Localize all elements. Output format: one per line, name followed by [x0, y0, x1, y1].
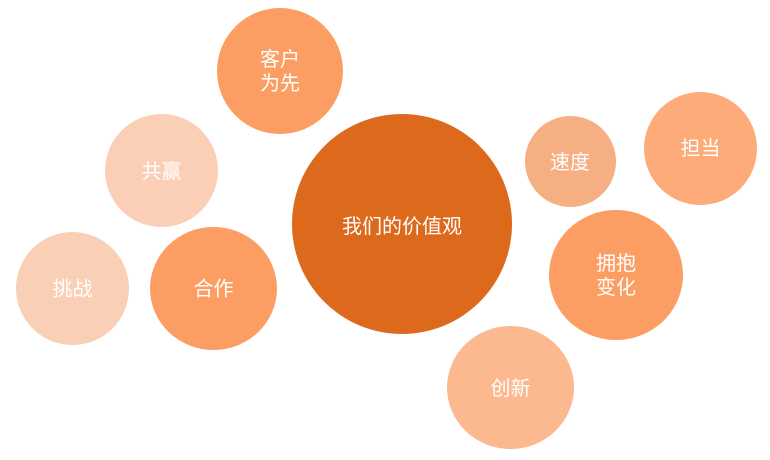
bubble: 担当: 担当: [680, 137, 720, 160]
bubble: 创新: 创新: [490, 377, 530, 400]
bubble: 共赢: [105, 114, 218, 227]
bubble: 创新: [447, 326, 574, 449]
bubble: 拥抱变化: [549, 210, 683, 340]
bubble: 客户为先: 客户: [260, 48, 300, 71]
bubble: 挑战: [16, 232, 129, 345]
central bubble: 我们的价值观: 我们的价值观: [342, 215, 462, 238]
bubble: 共赢: 共赢: [142, 160, 182, 183]
bubble: 拥抱变化: 拥抱: [596, 252, 636, 275]
central bubble: 我们的价值观: [292, 114, 512, 334]
bubble: 速度: 速度: [550, 151, 590, 174]
bubble: 合作: [150, 227, 277, 350]
bubble: 担当: [644, 92, 757, 205]
bubble: 速度: [525, 116, 616, 207]
bubble: 挑战: 挑战: [52, 278, 92, 300]
bubble: 拥抱变化: 变化: [596, 276, 636, 299]
bubble: 客户为先: [217, 8, 343, 134]
bubble: 客户为先: 为先: [260, 72, 300, 95]
bubble: 合作: 合作: [194, 278, 234, 300]
